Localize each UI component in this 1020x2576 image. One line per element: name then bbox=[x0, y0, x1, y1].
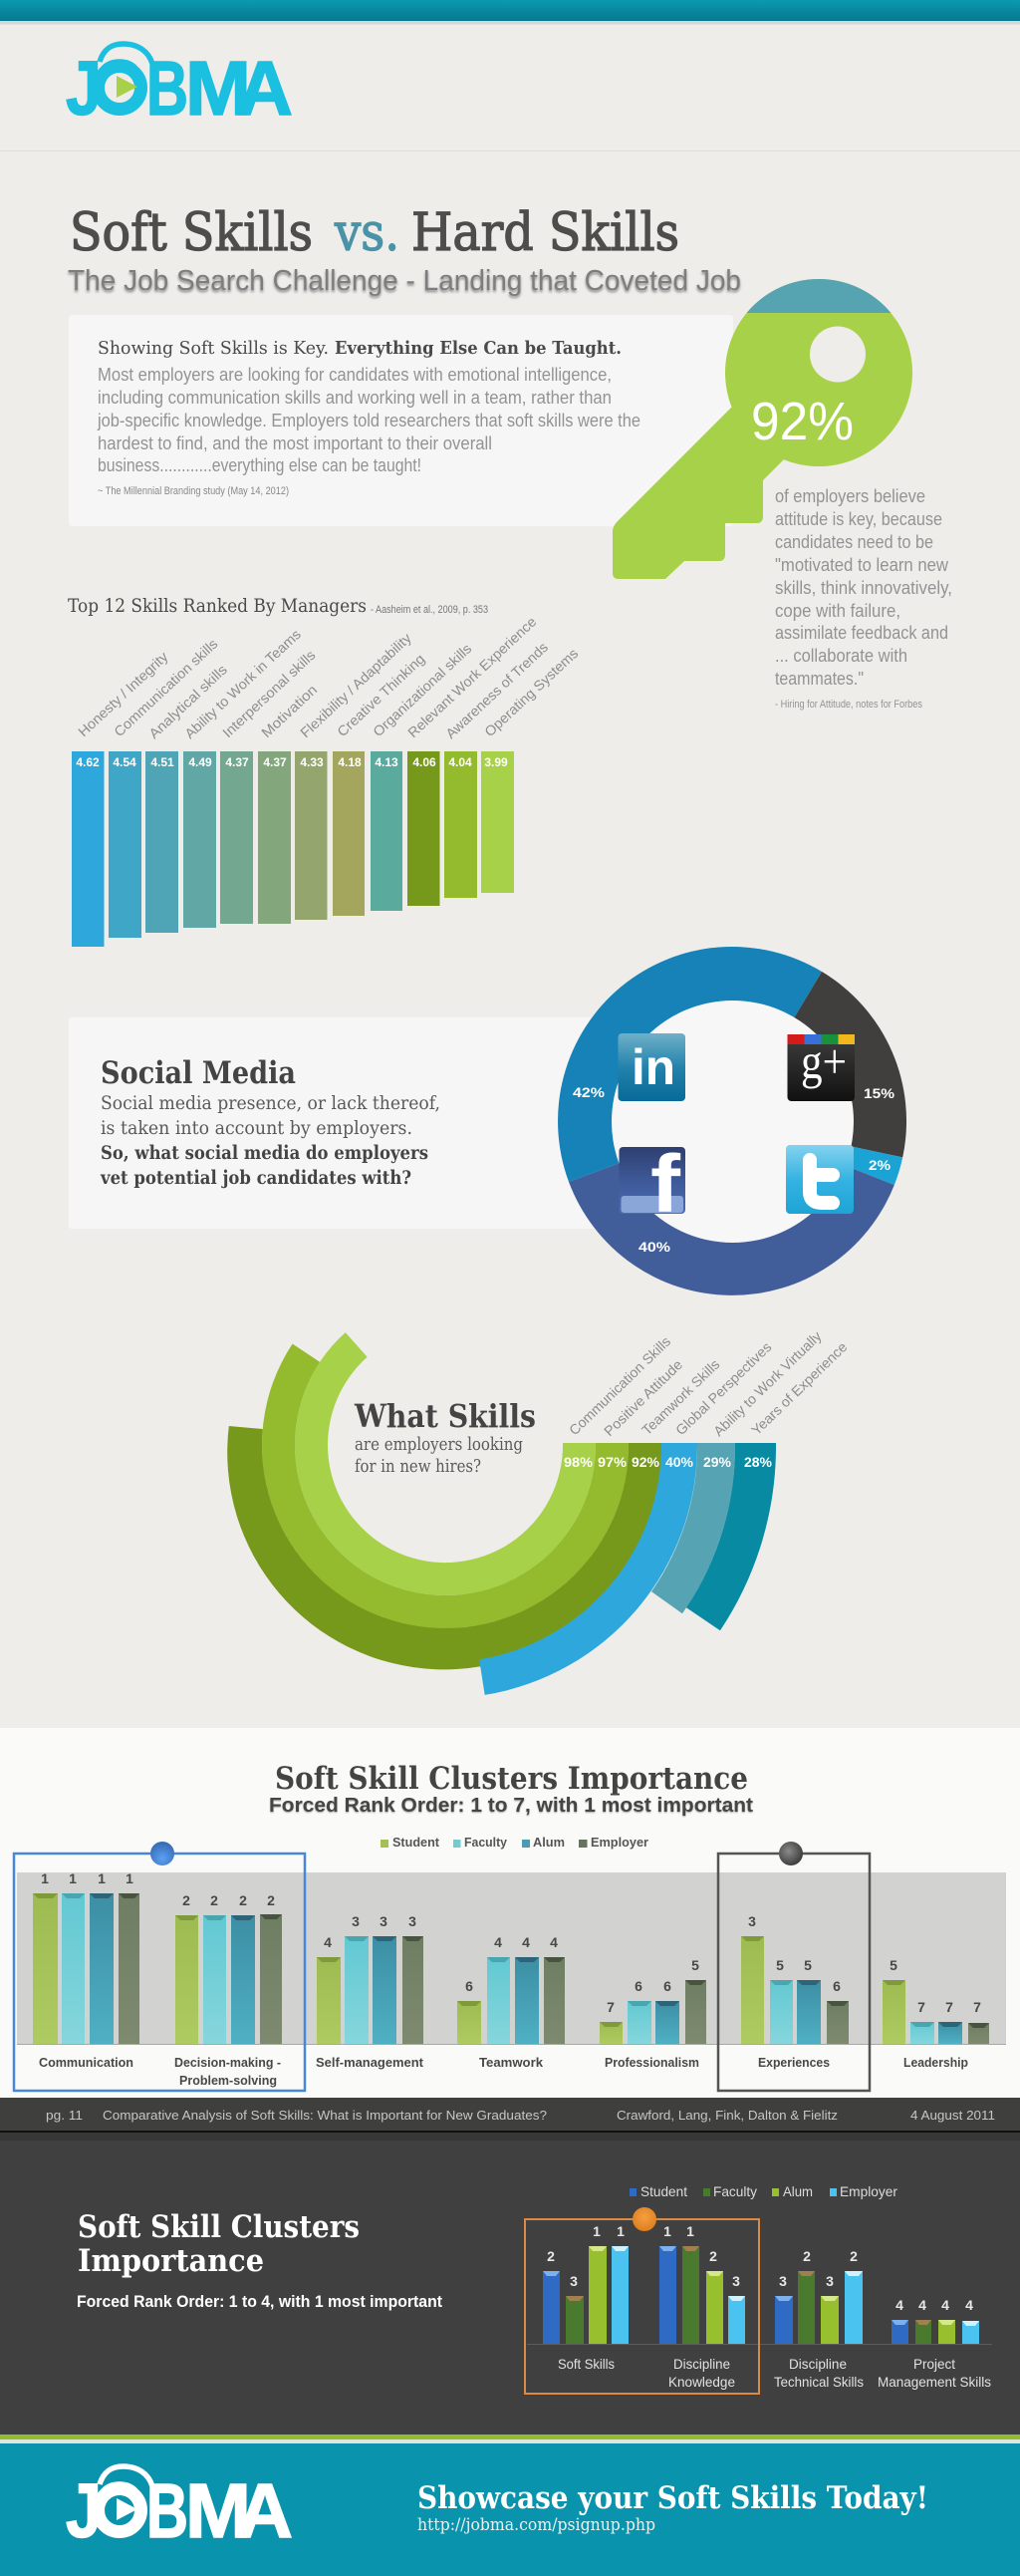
rank values: 5 bbox=[804, 1957, 812, 1973]
category labels dark: Management Skills bbox=[878, 2374, 991, 2390]
subheading: forced rank: Forced Rank Order: 1 to 7, with 1 most important bbox=[269, 1795, 753, 1817]
side quote text: of employers believe bbox=[775, 486, 925, 506]
percent labels: 92% bbox=[632, 1454, 660, 1470]
rank values dark: 3 bbox=[826, 2273, 834, 2289]
panel: soft skills intro bbox=[69, 315, 733, 526]
stat: 92%: 92% bbox=[751, 392, 854, 451]
logo: Jobma: A bbox=[237, 46, 293, 132]
body text: social media bbox=[100, 1092, 440, 1189]
bar values: 4.62 bbox=[76, 755, 100, 769]
axis labels: Relevant Work Experience bbox=[404, 613, 540, 740]
rank values: 1 bbox=[69, 1870, 77, 1886]
category labels dark: Soft Skills bbox=[558, 2356, 615, 2372]
axis labels: Ability to Work in Teams bbox=[181, 626, 304, 741]
cyan faculty bars bbox=[62, 1893, 934, 2044]
rank values: 3 bbox=[352, 1913, 360, 1929]
bar values: 4.37 bbox=[225, 755, 249, 769]
rank values: 7 bbox=[917, 1999, 925, 2015]
category labels: Communication bbox=[39, 2055, 133, 2070]
panel: soft skill clusters 1 to 4 bbox=[0, 2133, 1020, 2434]
footer strip: citation: Comparative Analysis of Soft Skills: What is Important for New Graduates? bbox=[103, 2108, 547, 2123]
category labels: Problem-solving bbox=[179, 2073, 277, 2088]
skill labels bbox=[566, 1328, 851, 1439]
rank values dark: 4 bbox=[965, 2297, 973, 2313]
donut labels: 15% bbox=[864, 1085, 895, 1101]
donut labels: 2% bbox=[869, 1157, 892, 1173]
skill labels: Teamwork Skills bbox=[638, 1356, 722, 1438]
body text: including communication skills and working well in a team, rather than bbox=[98, 388, 612, 408]
subtitle: The Job Search Challenge - Landing that Coveted Job bbox=[68, 265, 741, 297]
bar values bbox=[76, 755, 508, 769]
logo: Jobma: J bbox=[66, 46, 102, 132]
axis labels: Creative Thinking bbox=[334, 651, 427, 739]
body text: social media: is taken into account by employers. bbox=[101, 1117, 412, 1139]
footer strip: citation: 4 August 2011 bbox=[910, 2108, 995, 2123]
axis labels: Flexibility / Adaptability bbox=[297, 630, 414, 740]
legend dark: Student bbox=[640, 2183, 687, 2199]
rank values: 7 bbox=[945, 1999, 953, 2015]
heading: what skills bbox=[354, 1397, 536, 1477]
footer panel bbox=[0, 2443, 1020, 2576]
rank values dark: 2 bbox=[803, 2248, 811, 2264]
axis labels: Analytical skills bbox=[145, 662, 230, 741]
side quote text: ... collaborate with bbox=[775, 646, 907, 666]
category labels dark bbox=[558, 2356, 991, 2390]
heading: what skills: for in new hires? bbox=[355, 1456, 481, 1477]
side quote text: - Hiring for Attitude, notes for Forbes bbox=[775, 699, 922, 711]
logo: Jobma: M bbox=[185, 46, 251, 132]
heading: social media: Social Media bbox=[101, 1055, 296, 1091]
rank values dark: 1 bbox=[593, 2223, 601, 2239]
percent labels bbox=[564, 1454, 773, 1470]
bar values: 4.04 bbox=[448, 755, 472, 769]
heading: top 12 skills: - Aasheim et al., 2009, p. 353 bbox=[371, 604, 488, 616]
logo: Jobma: O bbox=[93, 45, 146, 131]
rank values: 4 bbox=[324, 1934, 332, 1950]
axis labels: Communication skills bbox=[111, 636, 221, 739]
rank values bbox=[41, 1870, 981, 2015]
bar values: 4.18 bbox=[338, 755, 362, 769]
rank values: 1 bbox=[126, 1870, 133, 1886]
rank values dark: 1 bbox=[686, 2223, 694, 2239]
logo: Jobma white: O bbox=[93, 2467, 146, 2553]
rank values dark bbox=[547, 2223, 973, 2313]
side quote text: assimilate feedback and bbox=[775, 623, 948, 643]
blue student bars bbox=[543, 2246, 908, 2344]
title: vs. bbox=[334, 203, 399, 263]
donut chart: social media bbox=[558, 947, 906, 1295]
rank values: 6 bbox=[663, 1978, 671, 1994]
rank values: 6 bbox=[465, 1978, 473, 1994]
bar values: 4.06 bbox=[412, 755, 436, 769]
heading: top 12 skills: Top 12 Skills Ranked By Managers bbox=[68, 595, 367, 617]
panel: soft skill clusters 1 to 7 bbox=[0, 1728, 1020, 2098]
source note: ~ The Millennial Branding study (May 14, 2012) bbox=[98, 485, 289, 497]
radial chart: what skills bbox=[227, 1328, 851, 1695]
green faculty bars bbox=[566, 2246, 931, 2344]
axis labels: Operating Systems bbox=[481, 645, 581, 739]
legend: Student bbox=[392, 1835, 440, 1850]
rank values: 2 bbox=[210, 1892, 218, 1908]
legend dark: Alum bbox=[783, 2183, 813, 2199]
highlight: dark box bbox=[718, 1842, 870, 2091]
body text: job-specific knowledge. Employers told researchers that soft skills were the bbox=[97, 411, 640, 430]
legend: Employer bbox=[591, 1835, 648, 1850]
body text: social media: Social media presence, or lack thereof, bbox=[101, 1092, 440, 1114]
title: Soft Skills bbox=[70, 203, 313, 263]
rank values dark: 1 bbox=[663, 2223, 671, 2239]
category labels: Experiences bbox=[758, 2055, 830, 2070]
axis labels: Motivation bbox=[258, 682, 320, 740]
bar values: 4.51 bbox=[150, 755, 174, 769]
donut labels bbox=[573, 1084, 895, 1255]
rank values: 5 bbox=[776, 1957, 784, 1973]
bar chart: clusters 1 to 7 bbox=[17, 1870, 1006, 2088]
icon: google plus bbox=[787, 1033, 855, 1101]
side quote text: candidates need to be bbox=[775, 532, 933, 552]
logo: Jobma white: J bbox=[66, 2468, 102, 2554]
category labels: Teamwork bbox=[479, 2055, 544, 2070]
rank values: 7 bbox=[973, 1999, 981, 2015]
icon: key 92% bbox=[613, 279, 912, 579]
category labels: Professionalism bbox=[605, 2055, 699, 2070]
rank values dark: 3 bbox=[732, 2273, 740, 2289]
rank values: 2 bbox=[239, 1892, 247, 1908]
bar values: 4.54 bbox=[113, 755, 136, 769]
axis labels bbox=[75, 613, 581, 741]
side quote text: attitude is key, because bbox=[775, 509, 942, 529]
bar caps dark bbox=[543, 2246, 979, 2326]
rank values dark: 4 bbox=[941, 2297, 949, 2313]
rank values: 4 bbox=[550, 1934, 558, 1950]
side quote text: "motivated to learn new bbox=[775, 555, 949, 575]
legend dark: Employer bbox=[840, 2183, 897, 2199]
category labels dark: Technical Skills bbox=[774, 2374, 864, 2390]
axis labels: Interpersonal skills bbox=[219, 647, 319, 740]
legend: Alum bbox=[533, 1835, 565, 1850]
lime alum bars bbox=[589, 2246, 955, 2344]
category labels: Self-management bbox=[316, 2055, 424, 2070]
olive employer bars bbox=[119, 1893, 989, 2044]
rank values: 6 bbox=[635, 1978, 642, 1994]
category labels: Leadership bbox=[903, 2055, 968, 2070]
body text: social media: vet potential job candidates with? bbox=[100, 1167, 411, 1189]
rank values: 5 bbox=[890, 1957, 897, 1973]
bar values: 3.99 bbox=[484, 755, 508, 769]
heading: clusters: Soft Skill Clusters Importance bbox=[275, 1761, 748, 1797]
rank values dark: 2 bbox=[850, 2248, 858, 2264]
logo: Jobma bbox=[66, 44, 293, 132]
heading: what skills: are employers looking bbox=[355, 1434, 523, 1455]
subheading: forced rank dark: Forced Rank Order: 1 to 4, with 1 most important bbox=[77, 2292, 442, 2311]
icon: facebook bbox=[620, 1139, 685, 1230]
body text: Most employers are looking for candidates with emotional intelligence, bbox=[98, 365, 612, 385]
body text: business............everything else can be taught! bbox=[98, 455, 421, 475]
legend bbox=[381, 1835, 648, 1850]
skill labels: Communication Skills bbox=[566, 1333, 673, 1438]
axis labels: Awareness of Trends bbox=[442, 639, 551, 741]
skill labels: Positive Attitude bbox=[601, 1356, 685, 1439]
percent labels: 40% bbox=[665, 1454, 694, 1470]
category labels: Decision-making - bbox=[174, 2055, 281, 2070]
bar values: 4.49 bbox=[188, 755, 212, 769]
rank values: 3 bbox=[380, 1913, 387, 1929]
rank values: 4 bbox=[494, 1934, 502, 1950]
side quote text: cope with failure, bbox=[775, 601, 900, 621]
body text bbox=[97, 365, 640, 475]
percent labels: 97% bbox=[598, 1454, 628, 1470]
percent labels: 29% bbox=[703, 1454, 732, 1470]
rank values: 1 bbox=[98, 1870, 106, 1886]
bar values: 4.37 bbox=[263, 755, 287, 769]
body text: hardest to find, and the most important to their overall bbox=[98, 433, 492, 453]
heading: clusters dark: Soft Skill Clusters bbox=[78, 2209, 360, 2245]
rank values: 2 bbox=[182, 1892, 190, 1908]
heading: clusters dark bbox=[78, 2209, 360, 2279]
bar caps bbox=[33, 1893, 989, 2028]
logo: Jobma white: M bbox=[185, 2468, 251, 2554]
category labels dark: Project bbox=[913, 2356, 955, 2372]
logo: Jobma: B bbox=[146, 46, 188, 132]
legend dark: Faculty bbox=[713, 2183, 757, 2199]
heading: showing soft skills: Showing Soft Skills is Key. bbox=[98, 338, 329, 359]
donut labels: 42% bbox=[573, 1084, 606, 1100]
bar values: 4.13 bbox=[375, 755, 398, 769]
rank values dark: 4 bbox=[918, 2297, 926, 2313]
bar chart: clusters 1 to 4 bbox=[527, 2223, 992, 2390]
category labels bbox=[39, 2055, 968, 2088]
footer strip: citation bbox=[0, 2098, 1020, 2133]
icon: google plus: g+ bbox=[801, 1033, 847, 1089]
body text: social media: So, what social media do employers bbox=[101, 1142, 428, 1164]
category labels dark: Discipline bbox=[673, 2356, 730, 2372]
axis labels: Honesty / Integrity bbox=[75, 649, 171, 739]
legend: Faculty bbox=[464, 1835, 508, 1850]
rank values dark: 3 bbox=[570, 2273, 578, 2289]
skill labels: Ability to Work Virtually bbox=[710, 1328, 825, 1439]
icon: linkedin bbox=[618, 1033, 685, 1101]
icon: linkedin: in bbox=[632, 1039, 675, 1095]
bars bbox=[72, 751, 514, 947]
title: Hard Skills bbox=[411, 203, 679, 263]
highlight: orange box bbox=[525, 2207, 759, 2394]
call to action: Showcase your Soft Skills Today! bbox=[417, 2480, 928, 2516]
footer strip: citation: pg. 11 bbox=[46, 2108, 83, 2123]
highlight: blue box bbox=[14, 1842, 305, 2091]
footer strip: citation: Crawford, Lang, Fink, Dalton & Fielitz bbox=[617, 2108, 838, 2123]
skill labels: Years of Experience bbox=[748, 1338, 851, 1438]
percent labels: 28% bbox=[744, 1454, 773, 1470]
category labels dark: Knowledge bbox=[668, 2374, 735, 2390]
legend dark bbox=[630, 2183, 897, 2199]
green divider bbox=[0, 2434, 1020, 2443]
title bbox=[70, 203, 679, 263]
percent labels: 98% bbox=[564, 1454, 594, 1470]
skill labels: Global Perspectives bbox=[672, 1338, 774, 1438]
bar values: 4.33 bbox=[300, 755, 324, 769]
heading: showing soft skills bbox=[98, 338, 622, 359]
rank values dark: 2 bbox=[709, 2248, 717, 2264]
axis labels: Organizational skills bbox=[370, 641, 474, 739]
panel: social media bbox=[69, 1017, 627, 1229]
category labels dark: Discipline bbox=[789, 2356, 847, 2372]
icon: twitter bbox=[786, 1145, 854, 1214]
signup url: http://jobma.com/psignup.php bbox=[417, 2515, 655, 2535]
teal alum bars bbox=[90, 1893, 962, 2044]
icon: facebook: f bbox=[650, 1139, 681, 1230]
rank values: 1 bbox=[41, 1870, 49, 1886]
rank values dark: 2 bbox=[547, 2248, 555, 2264]
rank values: 2 bbox=[267, 1892, 275, 1908]
rank values: 7 bbox=[607, 1999, 615, 2015]
heading: showing soft skills: Everything Else Can be Taught. bbox=[335, 338, 622, 359]
donut labels: 40% bbox=[638, 1239, 671, 1255]
logo: Jobma white: B bbox=[146, 2468, 188, 2554]
logo: Jobma white bbox=[66, 2466, 293, 2554]
rank values: 3 bbox=[408, 1913, 416, 1929]
bar chart: top 12 skills bbox=[72, 613, 581, 947]
rank values dark: 4 bbox=[895, 2297, 903, 2313]
logo: Jobma white: A bbox=[237, 2468, 293, 2554]
heading: what skills: What Skills bbox=[354, 1397, 536, 1435]
header bar bbox=[0, 0, 1020, 24]
side quote text: skills, think innovatively, bbox=[775, 578, 952, 598]
rank values dark: 3 bbox=[779, 2273, 787, 2289]
heading: clusters dark: Importance bbox=[78, 2243, 264, 2279]
rank values dark: 1 bbox=[617, 2223, 625, 2239]
green student bars bbox=[33, 1893, 905, 2044]
rank values: 5 bbox=[691, 1957, 699, 1973]
rank values: 3 bbox=[748, 1913, 756, 1929]
side quote text: teammates." bbox=[775, 669, 864, 689]
side quote text bbox=[775, 486, 952, 711]
rank values: 4 bbox=[522, 1934, 530, 1950]
cyan employer bars bbox=[612, 2246, 979, 2344]
rank values: 6 bbox=[833, 1978, 841, 1994]
